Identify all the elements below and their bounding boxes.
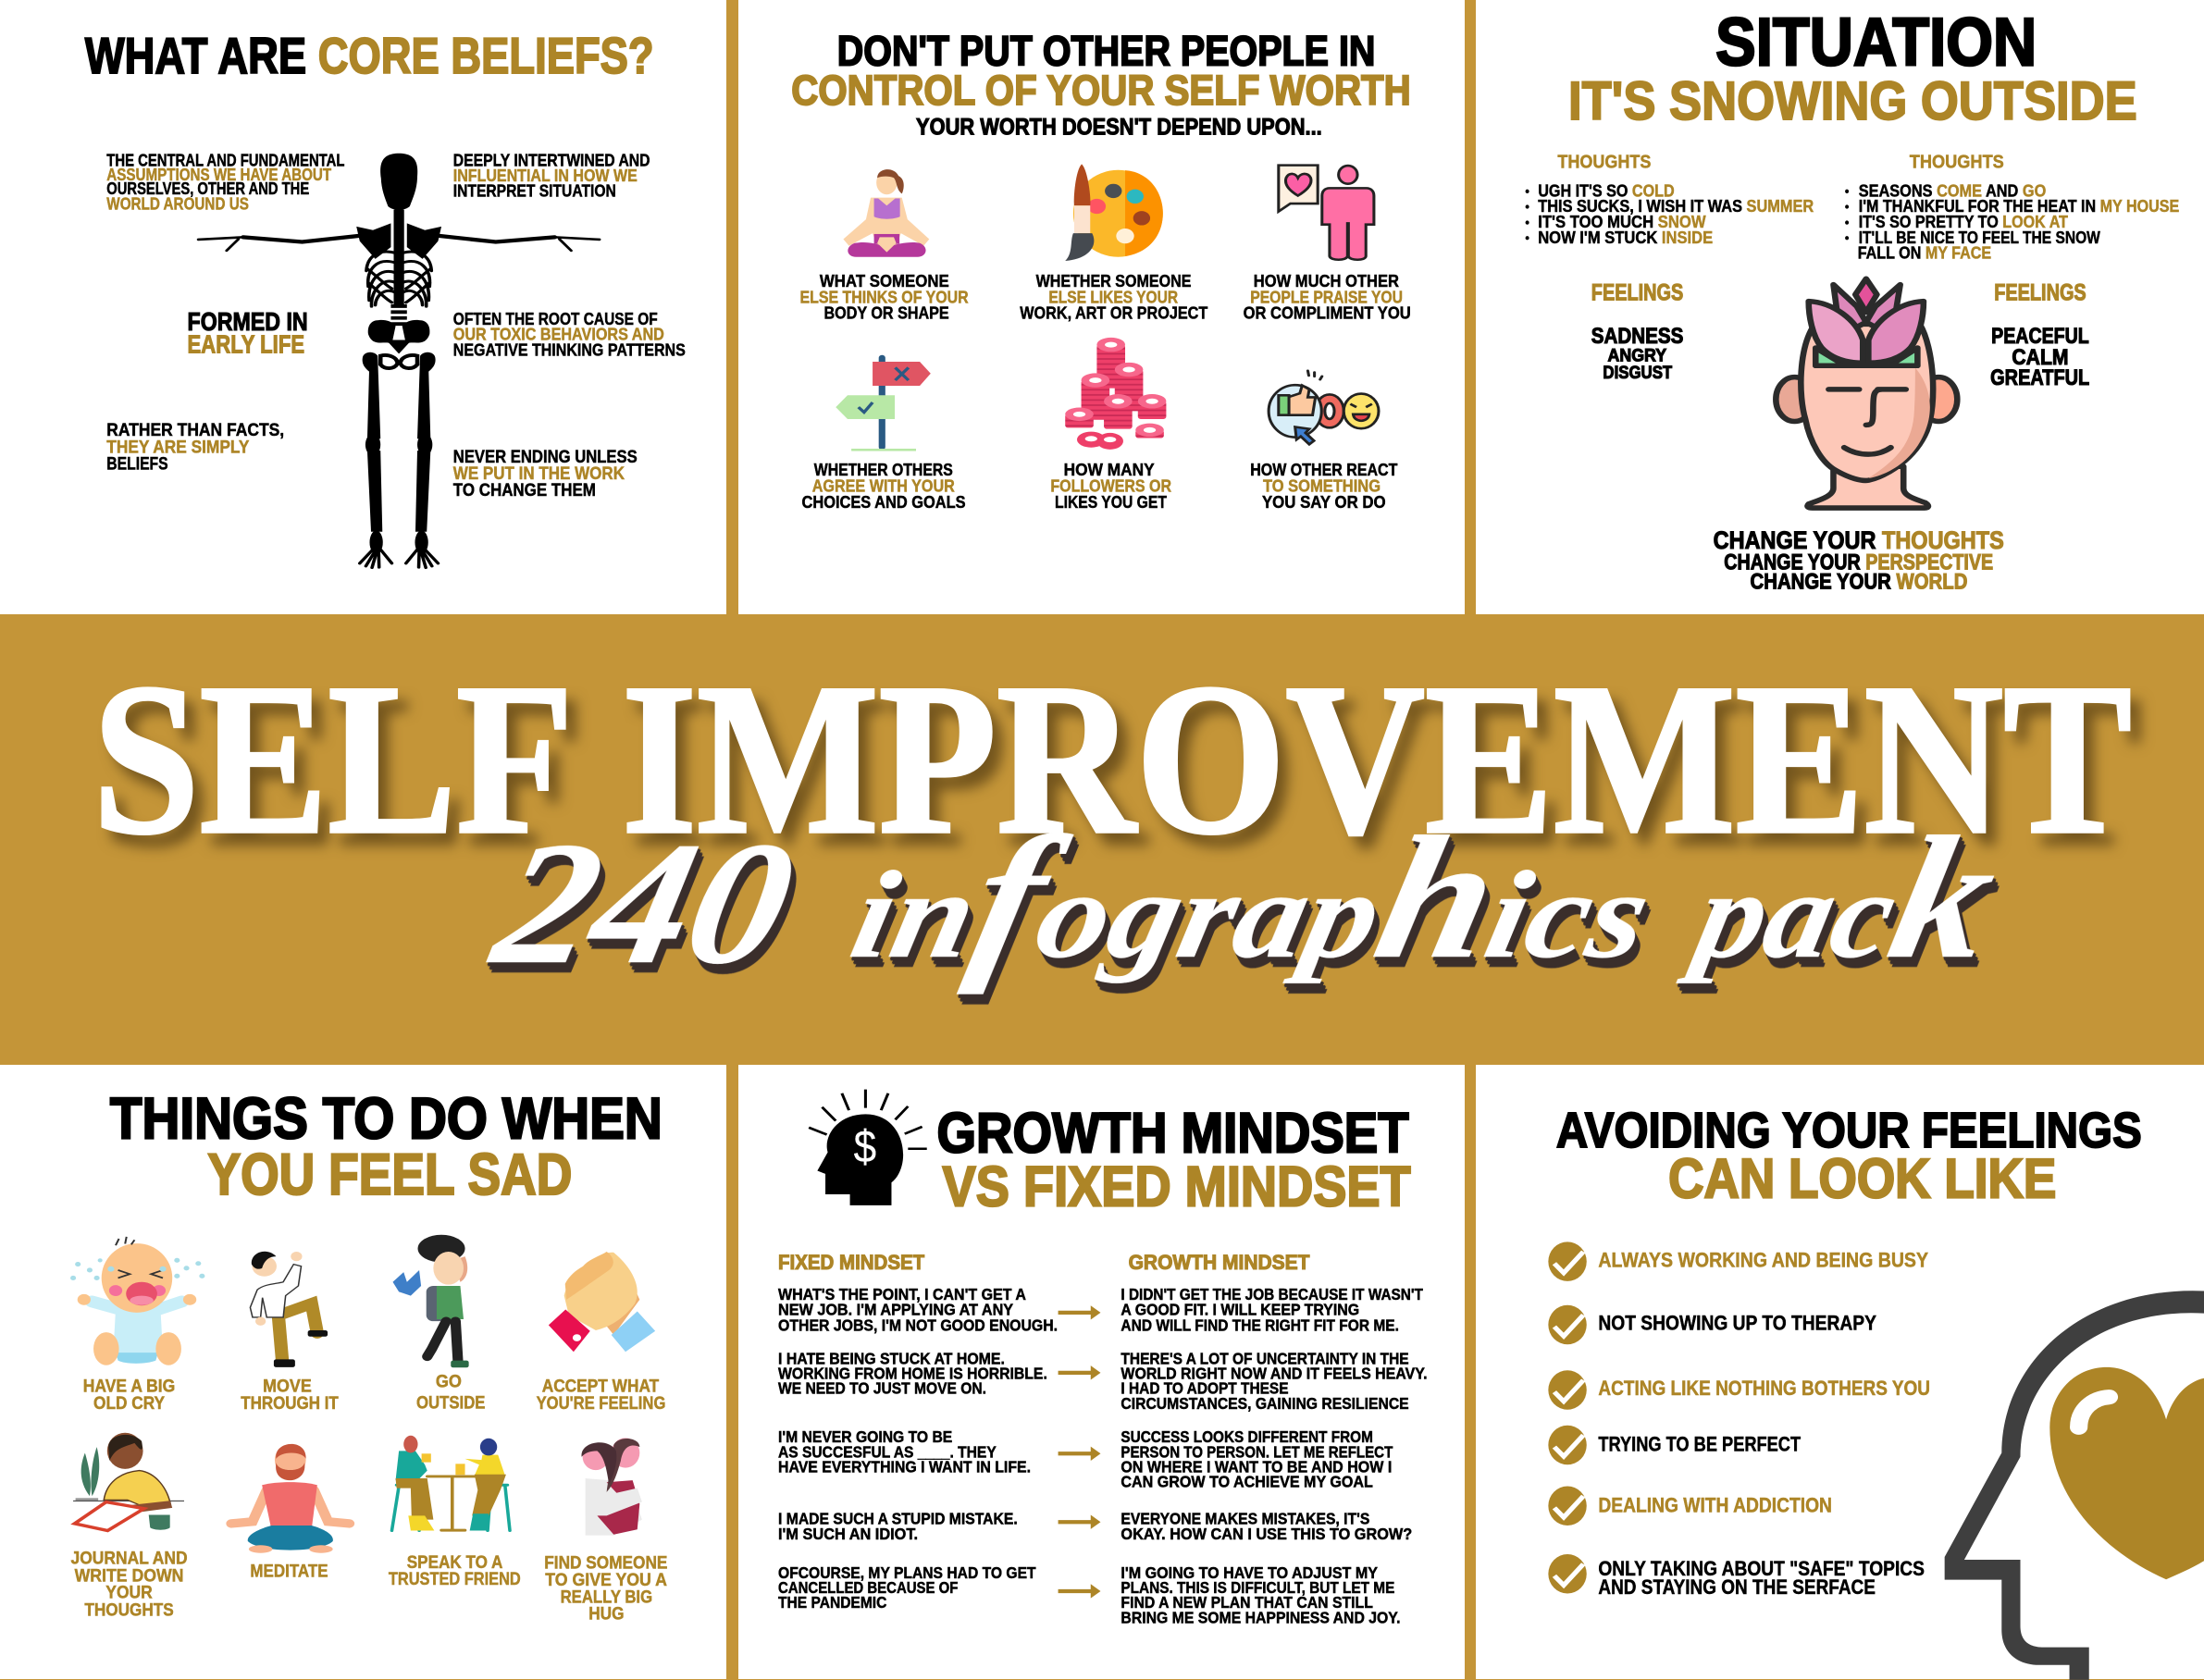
column: fixed mindset statements: OTHER JOBS, I'M NOT GOOD ENOUGH. — [778, 1317, 1058, 1335]
text: formed in early life — [188, 307, 308, 359]
column: fixed mindset statements: THE PANDEMIC — [778, 1595, 886, 1612]
text: change your thoughts: CHANGE YOUR PERSPECTIVE — [1724, 549, 1993, 574]
icon: person walking with bird — [392, 1235, 469, 1367]
feelings: left: DISGUST — [1603, 363, 1672, 382]
caption: whether someone likes: WORK, ART OR PROJECT — [1020, 303, 1208, 323]
column: fixed mindset statements: WORKING FROM HOME IS HORRIBLE. — [778, 1365, 1047, 1383]
heading: thoughts left: THOUGHTS — [1557, 151, 1651, 172]
text: rather than facts: RATHER THAN FACTS, — [106, 419, 284, 439]
panel: growth vs fixed mindset — [778, 1090, 1428, 1627]
column: fixed mindset statements — [778, 1287, 1058, 1612]
caption: what someone else thinks: WHAT SOMEONE — [820, 271, 949, 290]
caption: speak to a trusted friend: SPEAK TO A — [407, 1551, 503, 1572]
caption: move through it: MOVE — [263, 1376, 312, 1396]
icon: head with lotus — [1776, 278, 1957, 508]
text: root cause: OFTEN THE ROOT CAUSE OF — [453, 310, 658, 329]
list: avoidance behaviours: NOT SHOWING UP TO THERAPY — [1598, 1312, 1876, 1335]
column: growth mindset statements: PERSON TO PERSON. LET ME REFLECT — [1121, 1444, 1393, 1462]
caption: find someone: REALLY BIG — [561, 1586, 652, 1607]
caption: whether others agree: CHOICES AND GOALS — [802, 493, 966, 513]
caption: what someone else thinks: BODY OR SHAPE — [824, 303, 949, 323]
title: what are core beliefs: WHAT ARE CORE BELIEFS? — [85, 27, 654, 84]
list: negative thoughts: NOW I'M STUCK INSIDE — [1538, 228, 1713, 247]
caption: have a big old cry: OLD CRY — [93, 1392, 166, 1413]
feelings: right: GREATFUL — [1990, 364, 2089, 390]
column: growth mindset statements: CIRCUMSTANCES, GAINING RESILIENCE — [1121, 1395, 1409, 1413]
caption: whether someone likes: WHETHER SOMEONE — [1036, 271, 1191, 290]
column: fixed mindset statements: I MADE SUCH A STUPID MISTAKE. — [778, 1511, 1018, 1528]
text: root cause: OUR TOXIC BEHAVIORS AND — [453, 325, 664, 344]
text: rather than facts — [106, 419, 284, 474]
caption: journal: THOUGHTS — [84, 1599, 174, 1620]
title: situation — [1568, 5, 2137, 131]
column: growth mindset statements — [1121, 1287, 1428, 1627]
title: feel sad: THINGS TO DO WHEN — [110, 1086, 662, 1151]
column: growth mindset statements: EVERYONE MAKES MISTAKES, IT'S — [1121, 1511, 1369, 1528]
caption: whether someone likes — [1020, 271, 1208, 323]
list: avoidance behaviours: ONLY TAKING ABOUT "SAFE" TOPICS — [1598, 1558, 1925, 1580]
heading: fixed mindset: FIXED MINDSET — [778, 1252, 924, 1275]
column: growth mindset statements: THERE'S A LOT OF UNCERTAINTY IN THE — [1121, 1351, 1409, 1368]
text: never ending: TO CHANGE THEM — [453, 479, 596, 500]
caption: whether others agree — [802, 461, 966, 513]
icon: clasped hands — [549, 1252, 655, 1352]
list: positive thoughts: I'M THANKFUL FOR THE HEAT IN MY HOUSE — [1859, 197, 2179, 216]
icon: palette and brush — [1065, 164, 1163, 261]
text: root cause: NEGATIVE THINKING PATTERNS — [453, 340, 686, 360]
caption: reactions: TO SOMETHING — [1263, 476, 1381, 496]
list: negative thoughts: UGH IT'S SO COLD — [1538, 181, 1675, 201]
icon: head with dollar sign and rays — [809, 1090, 927, 1205]
icon: person with heart speech bubble — [1279, 166, 1374, 260]
panel: things to do when you feel sad — [70, 1086, 667, 1624]
banner subtitle: 240 infographics pack — [477, 800, 2012, 1001]
text: central assumptions: ASSUMPTIONS WE HAVE ABOUT — [106, 166, 331, 184]
panel: self worth — [791, 27, 1411, 513]
caption: followers: FOLLOWERS OR — [1050, 476, 1171, 496]
icon: crying baby — [70, 1237, 204, 1365]
text: change your thoughts — [1714, 526, 2004, 594]
caption: find someone: TO GIVE YOU A — [545, 1569, 667, 1590]
caption: what someone else thinks — [799, 271, 969, 323]
caption: whether others agree: AGREE WITH YOUR — [812, 476, 955, 496]
column: growth mindset statements: BRING ME SOME HAPPINESS AND JOY. — [1121, 1610, 1400, 1627]
column: growth mindset statements: A GOOD FIT. I WILL KEEP TRYING — [1121, 1302, 1359, 1319]
title: feel sad — [110, 1086, 662, 1207]
panel: situation — [1526, 5, 2179, 594]
caption: go outside: OUTSIDE — [416, 1391, 485, 1413]
feelings: left: SADNESS — [1591, 323, 1683, 348]
heading: thoughts right: THOUGHTS — [1910, 151, 2004, 172]
icon: man moving — [250, 1252, 328, 1367]
caption: go outside: GO — [436, 1370, 462, 1391]
caption: have a big old cry — [83, 1376, 175, 1413]
icons: check marks — [1548, 1241, 1587, 1593]
icon: head outline with heart — [1945, 1291, 2204, 1680]
panel: avoiding your feelings — [1548, 1102, 2204, 1680]
feelings: left: FEELINGS — [1591, 279, 1683, 305]
banner subtitle: 240 infographics pack: infographics — [838, 800, 1671, 995]
title: situation: SITUATION — [1715, 5, 2037, 80]
list: positive thoughts — [1845, 181, 2179, 263]
caption: what someone else thinks: ELSE THINKS OF YOUR — [799, 288, 969, 307]
title: mindset: GROWTH MINDSET — [936, 1101, 1409, 1165]
column: growth mindset statements: WORLD RIGHT NOW AND IT FEELS HEAVY. — [1121, 1365, 1428, 1383]
title: mindset — [936, 1101, 1411, 1218]
title: mindset: VS FIXED MINDSET — [943, 1155, 1411, 1218]
banner: background — [0, 614, 2204, 1065]
column: fixed mindset statements: NEW JOB. I'M APPLYING AT ANY — [778, 1302, 1013, 1319]
text: central assumptions: WORLD AROUND US — [106, 194, 249, 214]
text: change your thoughts: CHANGE YOUR WORLD — [1751, 569, 1967, 594]
column: growth mindset statements: FIND A NEW PLAN THAT CAN STILL — [1121, 1595, 1373, 1612]
caption: move through it — [241, 1376, 339, 1413]
caption: find someone: HUG — [588, 1602, 624, 1624]
caption: accept what you're feeling: ACCEPT WHAT — [542, 1376, 659, 1396]
caption: have a big old cry: HAVE A BIG — [83, 1376, 175, 1396]
caption: followers — [1050, 461, 1171, 513]
subtitle: YOUR WORTH DOESN'T DEPEND UPON... — [916, 114, 1322, 140]
caption: find someone — [544, 1552, 667, 1624]
text: never ending: NEVER ENDING UNLESS — [453, 446, 638, 466]
column: growth mindset statements: PLANS. THIS IS DIFFICULT, BUT LET ME — [1121, 1580, 1394, 1598]
panel: what are core beliefs — [85, 27, 686, 568]
icon: stacks of heart coins — [1065, 338, 1166, 450]
column: growth mindset statements: I DIDN'T GET THE JOB BECAUSE IT WASN'T — [1121, 1287, 1423, 1304]
caption: reactions: YOU SAY OR DO — [1262, 493, 1386, 513]
list: avoidance behaviours — [1598, 1249, 1930, 1599]
text: intertwined: INTERPRET SITUATION — [453, 181, 616, 201]
heading: growth mindset: GROWTH MINDSET — [1129, 1252, 1310, 1275]
text: never ending: WE PUT IN THE WORK — [453, 463, 625, 483]
column: fixed mindset statements: CANCELLED BECAUSE OF — [778, 1580, 959, 1598]
icon: two friends at a table — [391, 1436, 510, 1531]
icon: signpost — [836, 355, 931, 451]
title: avoiding your feelings: CAN LOOK LIKE — [1668, 1148, 2056, 1210]
caption: find someone: FIND SOMEONE — [544, 1552, 667, 1573]
title: self worth: DON'T PUT OTHER PEOPLE IN — [837, 27, 1375, 74]
text: intertwined: DEEPLY INTERTWINED AND — [453, 151, 650, 170]
list: negative thoughts: THIS SUCKS, I WISH IT WAS SUMMER — [1538, 197, 1814, 216]
caption: reactions — [1250, 461, 1398, 513]
column: growth mindset statements: ON WHERE I WANT TO BE AND HOW I — [1121, 1459, 1392, 1476]
list: avoidance behaviours: AND STAYING ON THE SERFACE — [1598, 1576, 1876, 1599]
text: formed in early life: FORMED IN — [188, 307, 308, 336]
caption: speak to a trusted friend — [389, 1551, 521, 1589]
icon: meditating man — [231, 1444, 350, 1553]
column: fixed mindset statements: WHAT'S THE POINT, I CAN'T GET A — [778, 1287, 1026, 1304]
title: self worth: CONTROL OF YOUR SELF WORTH — [791, 66, 1411, 114]
text: root cause — [453, 310, 686, 360]
column: fixed mindset statements: HAVE EVERYTHING I WANT IN LIFE. — [778, 1459, 1031, 1476]
icon: person journaling — [73, 1433, 184, 1531]
text: change your thoughts: CHANGE YOUR THOUGHTS — [1714, 526, 2004, 554]
caption: how much praise — [1244, 271, 1411, 323]
text: intertwined — [453, 151, 650, 201]
caption: journal — [71, 1548, 188, 1620]
caption: followers: HOW MANY — [1064, 461, 1155, 480]
list: positive thoughts: IT'LL BE NICE TO FEEL THE SNOW — [1859, 228, 2100, 247]
list: avoidance behaviours: TRYING TO BE PERFECT — [1598, 1433, 1801, 1456]
text: rather than facts: BELIEFS — [106, 452, 168, 474]
feelings: right: FEELINGS — [1994, 279, 2086, 305]
caption: accept what you're feeling — [537, 1376, 665, 1413]
caption: whether others agree: WHETHER OTHERS — [814, 461, 953, 480]
list: positive thoughts: FALL ON MY FACE — [1858, 243, 1991, 263]
list: avoidance behaviours: ACTING LIKE NOTHING BOTHERS YOU — [1598, 1377, 1930, 1400]
column: growth mindset statements: I'M GOING TO HAVE TO ADJUST MY — [1121, 1564, 1378, 1582]
feelings: right — [1990, 279, 2089, 390]
banner title: self improvement: SELF — [93, 638, 574, 879]
caption: how much praise: HOW MUCH OTHER — [1254, 271, 1399, 290]
column: growth mindset statements: CAN GROW TO ACHIEVE MY GOAL — [1121, 1474, 1373, 1491]
column: growth mindset statements: AND WILL FIND THE RIGHT FIT FOR ME. — [1121, 1317, 1399, 1335]
text: intertwined: INFLUENTIAL IN HOW WE — [453, 167, 638, 186]
title: feel sad: YOU FEEL SAD — [207, 1142, 572, 1207]
arrows: fixed to growth — [1059, 1305, 1100, 1599]
list: avoidance behaviours: ALWAYS WORKING AND BEING BUSY — [1598, 1249, 1928, 1272]
column: growth mindset statements: SUCCESS LOOKS DIFFERENT FROM — [1121, 1429, 1373, 1447]
caption: journal: WRITE DOWN — [75, 1564, 183, 1586]
caption: how much praise: PEOPLE PRAISE YOU — [1250, 288, 1403, 307]
column: growth mindset statements: OKAY. HOW CAN I USE THIS TO GROW? — [1121, 1526, 1412, 1543]
column: fixed mindset statements: OFCOURSE, MY PLANS HAD TO GET — [778, 1564, 1036, 1582]
title: avoiding your feelings — [1556, 1102, 2142, 1210]
list: negative thoughts: IT'S TOO MUCH SNOW — [1538, 213, 1706, 232]
feelings: right: CALM — [2012, 344, 2069, 369]
caption: how much praise: OR COMPLIMENT YOU — [1244, 303, 1411, 323]
caption: followers: LIKES YOU GET — [1055, 493, 1167, 513]
caption: reactions: HOW OTHER REACT — [1250, 461, 1398, 480]
text: central assumptions — [106, 151, 344, 214]
caption: whether someone likes: ELSE LIKES YOUR — [1048, 288, 1178, 307]
column: fixed mindset statements: AS SUCCESFUL AS ____. THEY — [778, 1444, 997, 1462]
caption: go outside — [416, 1370, 485, 1413]
caption: meditate: MEDITATE — [250, 1561, 328, 1581]
title: self worth — [791, 27, 1411, 114]
column: fixed mindset statements: I'M SUCH AN IDIOT. — [778, 1526, 918, 1543]
feelings: left: ANGRY — [1607, 345, 1666, 365]
caption: accept what you're feeling: YOU'RE FEELING — [537, 1392, 665, 1413]
feelings: right: PEACEFUL — [1991, 323, 2089, 348]
icon: hug — [581, 1438, 642, 1536]
text: never ending — [453, 446, 638, 500]
text: formed in early life: EARLY LIFE — [188, 330, 304, 359]
text: central assumptions: OURSELVES, OTHER AND THE — [106, 179, 309, 199]
column: fixed mindset statements: I HATE BEING STUCK AT HOME. — [778, 1351, 1005, 1368]
column: fixed mindset statements: WE NEED TO JUST MOVE ON. — [778, 1380, 986, 1398]
text: central assumptions: THE CENTRAL AND FUNDAMENTAL — [106, 151, 344, 170]
column: fixed mindset statements: I'M NEVER GOING TO BE — [778, 1429, 952, 1447]
caption: move through it: THROUGH IT — [241, 1392, 339, 1413]
caption: journal: JOURNAL AND — [71, 1548, 188, 1568]
caption: speak to a trusted friend: TRUSTED FRIEND — [389, 1568, 521, 1589]
text: rather than facts: THEY ARE SIMPLY — [106, 436, 250, 457]
icon: skeleton — [198, 154, 600, 568]
banner subtitle: 240 infographics pack: pack — [1674, 800, 2012, 995]
column: growth mindset statements: I HAD TO ADOPT THESE — [1121, 1380, 1289, 1398]
list: negative thoughts — [1526, 181, 1814, 247]
list: positive thoughts: IT'S SO PRETTY TO LOOK AT — [1859, 213, 2068, 232]
feelings: left — [1591, 279, 1683, 382]
caption: journal: YOUR — [105, 1581, 153, 1602]
banner subtitle: 240 infographics pack: 240 — [477, 806, 809, 1001]
icon: like and emoji reactions — [1269, 371, 1379, 444]
icon: head with dollar sign and rays: $ — [854, 1122, 876, 1172]
list: avoidance behaviours: DEALING WITH ADDICTION — [1598, 1494, 1832, 1517]
icon: yoga woman — [843, 169, 929, 257]
list: positive thoughts: SEASONS COME AND GO — [1859, 181, 2046, 201]
